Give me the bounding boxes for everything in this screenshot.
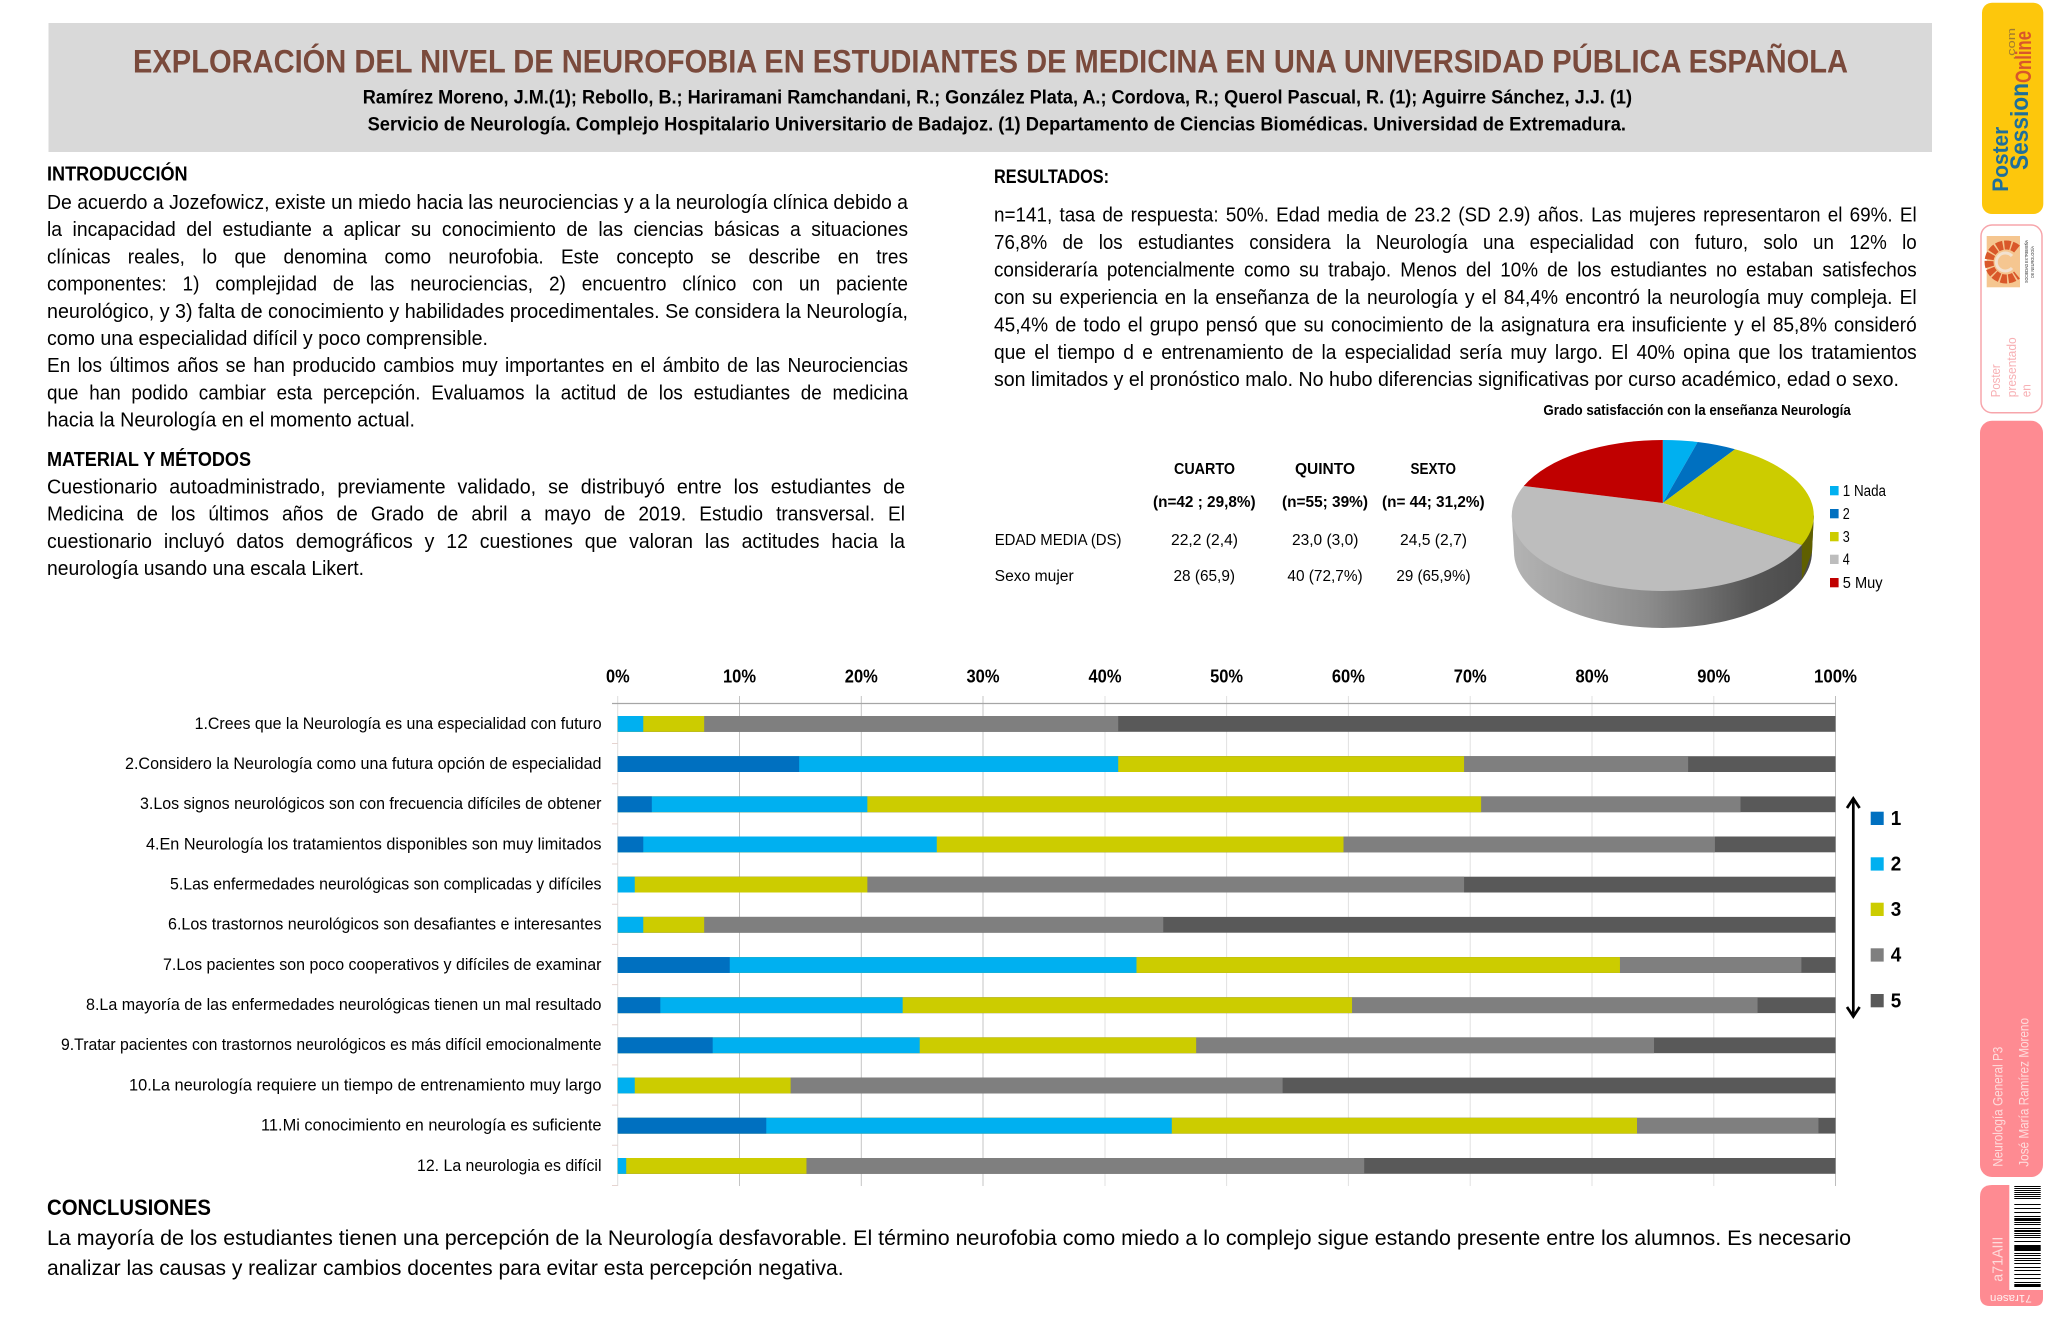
bar: question 12 [618, 1158, 1836, 1174]
text: poster presentado en [1989, 337, 2034, 397]
bar: question 2 [618, 756, 1836, 772]
text block: introducción [47, 191, 909, 432]
pie side wall: olive segment [1802, 516, 1814, 580]
text block: introducción: que han podido cambiar esta percepción. Evaluamos la actitud de los estudiantes de medicina [47, 381, 909, 404]
text block: introducción: hacia la Neurología en el momento actual. [47, 409, 415, 432]
question labels: 7.Los pacientes son poco cooperativos y difíciles de examinar [163, 956, 602, 974]
bar: question 4 [618, 836, 1836, 852]
sidebar panel: Poster Session Online logo: .com [2006, 28, 2018, 60]
legend: Likert scale: 4 [1891, 944, 1902, 967]
sidebar panel: Poster Session Online logo [1982, 3, 2043, 214]
text block: resultados: consideraría potencialmente como su trabajo. Menos del 10% de los estudiantes no estaban satisfechos [994, 259, 1917, 282]
text block: material y métodos [47, 475, 906, 580]
axis percent labels: 100% [1814, 666, 1857, 687]
code: 71rasen: 71rasen [1990, 1292, 2032, 1304]
bar: question 1 [618, 716, 1836, 732]
table: demographics by course: 40 (72,7%) [1287, 568, 1363, 585]
table: demographics by course: Sexo mujer [995, 568, 1074, 585]
pie legend: 4 [1843, 552, 1850, 569]
bar: question 9 [618, 1037, 1836, 1053]
question labels: 12. La neurologia es difícil [417, 1157, 602, 1175]
text block: conclusiones [47, 1226, 1851, 1280]
panel: resultados [994, 166, 1917, 391]
pie legend: 3 [1843, 529, 1850, 546]
table: demographics by course: 28 (65,9) [1174, 568, 1235, 585]
axis percent labels [606, 666, 1857, 687]
table: demographics by course: (n=42 ; 29,8%) [1153, 494, 1256, 511]
axis percent labels: 80% [1576, 666, 1608, 687]
bar: question 8 [618, 997, 1836, 1013]
table: demographics by course: (n= 44; 31,2%) [1382, 494, 1485, 511]
pie slice: 3 [1663, 449, 1814, 545]
pie slice: 4 [1512, 486, 1802, 591]
heading: resultados: RESULTADOS: [994, 166, 1109, 188]
header band [48, 23, 1932, 152]
sidebar panel: session and author [1980, 421, 2043, 1177]
sidebar panel: barcode and code [1980, 1185, 2043, 1306]
sidebar panel: Poster Session Online logo: Poster [1988, 126, 2013, 192]
axis percent labels: 0% [606, 666, 630, 687]
sidebar panel: Poster Session Online logo: Session [2006, 83, 2034, 170]
table: demographics by course: CUARTO [1174, 461, 1235, 478]
text: poster presentado en: presentado [2005, 337, 2019, 397]
axis percent labels: 10% [723, 666, 756, 687]
text block: material y métodos: Cuestionario autoadministrado, previamente validado, se distribuyó entre los estudiantes de [47, 475, 905, 498]
pie legend [1830, 483, 1886, 592]
text block: material y métodos: cuestionario incluyó datos demográficos y 12 cuestiones que valoran las actitudes hacia la [47, 530, 906, 553]
arrow: double-headed scale [1847, 798, 1860, 1017]
axis percent labels: 50% [1210, 666, 1243, 687]
code: a71AIII: a71AIII [1990, 1237, 2007, 1282]
bar: question 3 [618, 796, 1836, 812]
authors: Ramírez Moreno, J.M.(1); Rebollo, B.; Hariramani Ramchandani, R.; González Plata, A.; Cordova, R.; Querol Pascual, R. (1); Aguirre Sánchez, J.J. (1) [363, 87, 1632, 109]
question labels: 3.Los signos neurológicos son con frecuencia difíciles de obtener [140, 795, 602, 813]
table: demographics by course: EDAD MEDIA (DS) [995, 532, 1122, 549]
text block: resultados: 76,8% de los estudiantes considera la Neurología una especialidad con futuro, solo un 12% lo [994, 231, 1917, 254]
question labels: 1.Crees que la Neurología es una especialidad con futuro [195, 715, 602, 733]
text block: conclusiones: La mayoría de los estudiantes tienen una percepción de la Neurología desfavorable. El término neurofobia como miedo a lo complejo sigue estando presente entre los alumnos. Es necesario [47, 1226, 1851, 1250]
sidebar panel: session and author: Neurología General P3 [1990, 1047, 2006, 1167]
text block: introducción: neurológico, y 3) falta de conocimiento y habilidades procedimentales. Se considera la Neurología, [47, 300, 908, 323]
panel: material y métodos [47, 448, 906, 580]
pie slice: 5 Muy [1524, 440, 1663, 503]
heading: conclusiones: CONCLUSIONES [47, 1195, 211, 1220]
chart grid and axes [612, 696, 1836, 1186]
text block: resultados [994, 204, 1917, 391]
axis percent labels: 90% [1697, 666, 1730, 687]
pie chart: grado de satisfacción [1512, 402, 1886, 628]
icon: society logo: SOCIEDAD EXTREMEÑA [2023, 239, 2029, 283]
panel: introducción [47, 162, 909, 432]
bar: question 6 [618, 917, 1836, 933]
table: demographics by course: 24,5 (2,7) [1400, 532, 1467, 549]
legend: Likert scale: 1 [1891, 807, 1901, 830]
legend: Likert scale: 2 [1891, 853, 1901, 876]
text: poster presentado en: en [2020, 384, 2034, 397]
pie slice: 2 [1663, 442, 1735, 503]
pie legend: 2 [1843, 506, 1850, 523]
pie legend: 5 Muy [1843, 575, 1883, 592]
stacked bar chart: Likert responses [61, 666, 1857, 1186]
axis percent labels: 20% [845, 666, 878, 687]
table: demographics by course: (n=55; 39%) [1282, 494, 1368, 511]
question labels: 6.Los trastornos neurológicos son desafiantes e interesantes [168, 916, 602, 934]
barcode [2014, 1186, 2041, 1286]
pie side wall [1512, 516, 1814, 628]
axis percent labels: 60% [1332, 666, 1365, 687]
question labels: 8.La mayoría de las enfermedades neurológicas tienen un mal resultado [86, 996, 602, 1014]
text block: conclusiones: analizar las causas y realizar cambios docentes para evitar esta percepción negativa. [47, 1256, 844, 1280]
axis percent labels: 40% [1088, 666, 1122, 687]
pie legend: 1 Nada [1843, 483, 1886, 500]
text block: introducción: componentes: 1) complejidad de las neurociencias, 2) encuentro clínico con un paciente [47, 273, 908, 296]
chart title: Grado satisfacción con la enseñanza Neurología [1543, 402, 1851, 419]
icon: society logo [1987, 236, 2035, 287]
sidebar panel: Poster Session Online logo: Online [2011, 31, 2036, 83]
question labels [61, 715, 602, 1175]
text: poster presentado en: Poster [1989, 364, 2003, 397]
text block: material y métodos: neurología usando una escala Likert. [47, 557, 364, 580]
question labels: 5.Las enfermedades neurológicas son complicadas y difíciles [170, 876, 602, 894]
legend: Likert scale: 3 [1891, 898, 1901, 921]
table: demographics by course: SEXTO [1410, 461, 1456, 478]
axis percent labels: 70% [1454, 666, 1487, 687]
text block: introducción: De acuerdo a Jozefowicz, existe un miedo hacia las neurociencias y a la neurología clínica debido a [47, 191, 909, 214]
question labels: 9.Tratar pacientes con trastornos neurológicos es más difícil emocionalmente [61, 1036, 602, 1054]
axis percent labels: 30% [966, 666, 1000, 687]
text block: resultados: que el tiempo d e entrenamiento de la especialidad sería muy largo. El 40% opina que los tratamientos [994, 341, 1917, 364]
table: demographics by course [995, 461, 1485, 585]
bar: question 10 [618, 1078, 1836, 1093]
legend: Likert scale [1871, 807, 1902, 1012]
icon: society logo: DE NEUROLOGÍA [2029, 245, 2035, 278]
text block: introducción: En los últimos años se han producido cambios muy importantes en el ámbito de las Neurociencias [47, 354, 908, 377]
title: EXPLORACIÓN DEL NIVEL DE NEUROFOBIA EN ESTUDIANTES DE MEDICINA EN UNA UNIVERSIDAD PÚBLICA ESPAÑOLA [133, 42, 1848, 79]
text block: resultados: son limitados y el pronóstico malo. No hubo diferencias significativas por curso académico, edad o sexo. [994, 368, 1899, 391]
legend: Likert scale: 5 [1891, 989, 1901, 1012]
panel: conclusiones [47, 1195, 1851, 1280]
question labels: 10.La neurología requiere un tiempo de entrenamiento muy largo [129, 1076, 602, 1094]
bar: question 5 [618, 877, 1836, 892]
table: demographics by course: QUINTO [1295, 461, 1355, 478]
heading: introducción: INTRODUCCIÓN [47, 162, 188, 186]
text block: introducción: clínicas reales, lo que denomina como neurofobia. Este concepto se describe en tres [47, 245, 908, 268]
sidebar panel: session and author: José María Ramírez Moreno [2015, 1018, 2031, 1167]
text block: introducción: como una especialidad difícil y poco comprensible. [47, 327, 488, 350]
bar: question 7 [618, 957, 1836, 973]
question labels: 2.Considero la Neurología como una futura opción de especialidad [125, 755, 602, 773]
table: demographics by course: 23,0 (3,0) [1292, 532, 1358, 549]
heading: material y métodos: MATERIAL Y MÉTODOS [47, 448, 251, 471]
affiliations: Servicio de Neurología. Complejo Hospitalario Universitario de Badajoz. (1) Departamento de Ciencias Biomédicas. Universidad de Extremadura. [368, 113, 1626, 135]
table: demographics by course: 22,2 (2,4) [1171, 532, 1238, 549]
text block: resultados: n=141, tasa de respuesta: 50%. Edad media de 23.2 (SD 2.9) años. Las mujeres representaron el 69%. El [994, 204, 1917, 227]
sidebar panel: presented at [1981, 225, 2042, 413]
text block: resultados: con su experiencia en la enseñanza de la neurología y el 84,4% encontró la neurología muy compleja. El [994, 286, 1917, 309]
text block: resultados: 45,4% de todo el grupo pensó que su conocimiento de la asignatura era insuficiente y el 85,8% consideró [994, 314, 1917, 337]
question labels: 4.En Neurología los tratamientos disponibles son muy limitados [146, 835, 602, 853]
text block: introducción: la incapacidad del estudiante a aplicar su conocimiento de las ciencias básicas a situaciones [47, 218, 908, 241]
pie slice: 1 Nada [1663, 440, 1698, 503]
question labels: 11.Mi conocimiento en neurología es suficiente [261, 1117, 602, 1135]
table: demographics by course: 29 (65,9%) [1396, 568, 1470, 585]
text block: material y métodos: Medicina de los últimos años de Grado de abril a mayo de 2019. Estudio transversal. El [47, 503, 905, 526]
bar: question 11 [618, 1118, 1836, 1134]
